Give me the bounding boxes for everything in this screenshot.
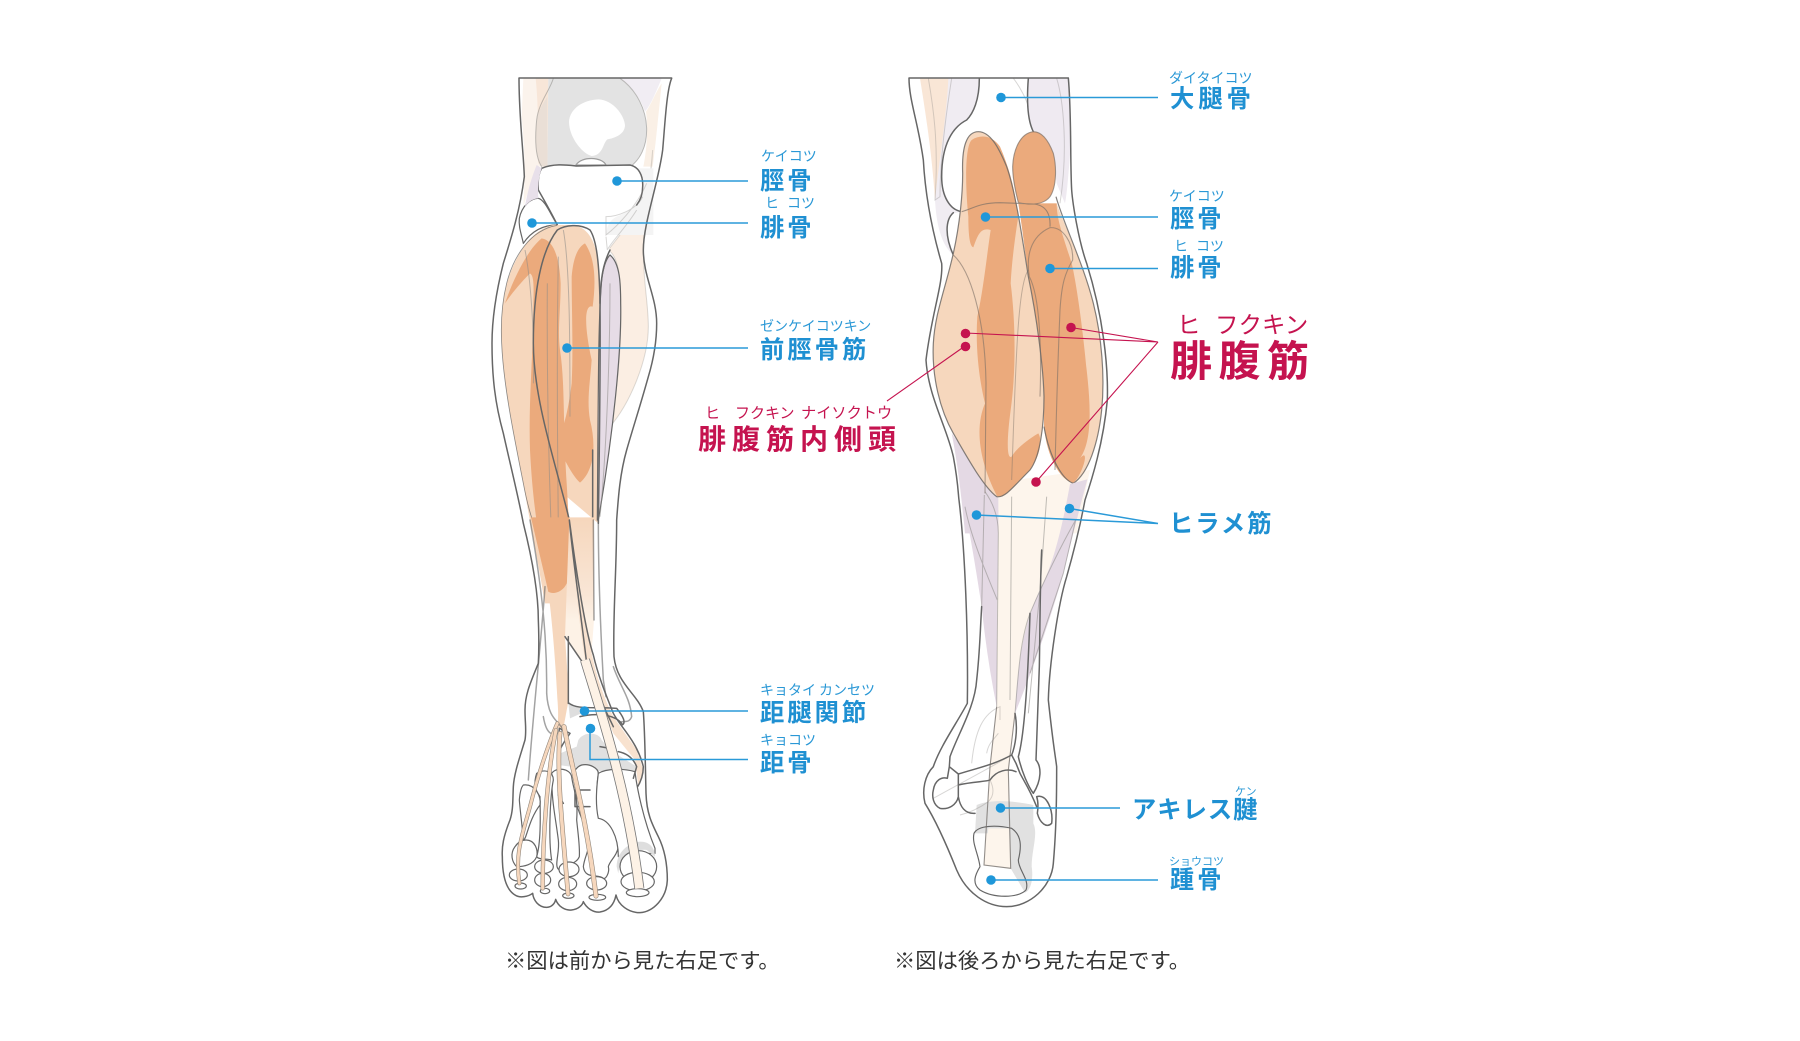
foot bones grey patches (558, 734, 637, 777)
tissue lines near tibia (606, 183, 647, 250)
left soleus purple (965, 510, 998, 707)
back lower leg anatomy (933, 479, 1087, 896)
tibia lower bone (565, 637, 603, 713)
lower muscle (531, 517, 570, 593)
front lower leg and foot anatomy (509, 517, 657, 900)
heel bone (974, 826, 1027, 896)
label: 距腿関節: キョタイ (760, 682, 816, 698)
lateral muscle dark (966, 137, 1040, 497)
muscle dark band 1 (505, 238, 569, 595)
toe tendons (518, 723, 557, 883)
fibula shaft line (593, 250, 610, 523)
big toe bones (620, 851, 657, 883)
first metatarsal (596, 769, 655, 857)
purple calf sliver (597, 255, 621, 520)
label: 腓骨 front: コツ (787, 195, 815, 211)
front skin outline (492, 78, 672, 913)
label: 腓骨 back: コツ (1196, 238, 1224, 254)
cream center shaft (984, 493, 1067, 868)
label: 腓骨 front (760, 195, 815, 242)
muscle base light (501, 225, 600, 603)
label: 腓腹筋内側頭: ヒ (705, 405, 720, 422)
label: 距骨 front: 距骨 (760, 750, 815, 777)
tissue lines (928, 78, 1064, 203)
leader line: 腓骨 back (1045, 264, 1158, 273)
thigh tissue (522, 78, 548, 207)
fibula head (519, 198, 557, 243)
muscle dark band 2 (555, 243, 594, 483)
ankle grey wedge (568, 703, 590, 718)
lateral muscle light (933, 132, 1044, 497)
note: front view: ※図は前から見た右足です。 (505, 949, 780, 973)
muscle left outline (501, 225, 557, 523)
tibia cream shaft (565, 517, 594, 673)
right thigh peach (643, 83, 662, 167)
label: 脛骨 front: 脛骨 (760, 168, 815, 195)
label: 腓腹筋: ヒ (1177, 312, 1200, 338)
talus and ankle faint lines (933, 707, 1012, 815)
muscle outline (933, 132, 1044, 497)
left purple tissue (935, 78, 978, 255)
label: 踵骨: ショウコツ (1169, 855, 1224, 868)
leader line: 脛骨 front (612, 176, 748, 186)
label: 前脛骨筋 (760, 318, 871, 364)
label: アキレス腱 (1132, 785, 1258, 824)
small upper muscle head (1013, 132, 1056, 204)
label: 腓骨 front: ヒ (765, 195, 779, 211)
label: 脛骨 back: 脛骨 (1170, 206, 1225, 233)
label: 前脛骨筋: 前脛骨筋 (760, 337, 869, 364)
femur side shade (536, 97, 547, 167)
right soleus purple (1015, 479, 1087, 713)
label: 脛骨 front (760, 148, 817, 195)
label: 脛骨 back: ケイコツ (1169, 188, 1225, 204)
calcaneus grey shade (975, 801, 1035, 893)
label: 腓腹筋内側頭 (698, 405, 902, 455)
main tendon to big toe (585, 660, 639, 888)
label: 腓腹筋内側頭: フクキン (735, 405, 795, 422)
front upper leg anatomy (501, 78, 662, 683)
peach thigh muscle (920, 78, 950, 200)
leader lines: ヒラメ筋 (972, 504, 1158, 524)
back upper leg anatomy (920, 78, 1103, 533)
label: 脛骨 front: ケイコツ (761, 148, 817, 164)
back view leg illustration (909, 78, 1107, 907)
label: 前脛骨筋: ゼンケイコツキン (760, 318, 871, 334)
tibia contour (962, 132, 1056, 227)
lateral peach tissue (608, 150, 653, 427)
upper purple tissue (620, 78, 662, 112)
leader line: 腓腹筋内側頭 (887, 342, 970, 401)
ankle bones (933, 607, 1037, 813)
label: 腓骨 back: 腓骨 (1170, 255, 1225, 282)
tarsal lines (558, 715, 637, 807)
label: 大腿骨: 大腿骨 (1170, 86, 1255, 113)
label: 距腿関節: カンセツ (819, 682, 875, 698)
peach strip (536, 78, 548, 165)
label: アキレス腱: アキレス腱 (1132, 797, 1258, 824)
front view leg illustration (492, 78, 672, 913)
label: 大腿骨 (1169, 70, 1255, 113)
label: ヒラメ筋: ヒラメ筋 (1169, 511, 1273, 538)
big toe grey (617, 842, 655, 873)
tibialis outline lines (569, 520, 643, 788)
label: アキレス腱: ケン (1235, 785, 1257, 798)
note: back view: ※図は後ろから見た右足です。 (894, 949, 1190, 973)
label: 腓腹筋内側頭: 腓腹筋内側頭 (698, 424, 902, 455)
leader line: 前脛骨筋 (562, 343, 748, 353)
tibia head (576, 158, 606, 165)
tibialis anterior outline (533, 226, 600, 523)
label: 腓骨 back: ヒ (1174, 238, 1188, 254)
label: 腓腹筋: 腓腹筋 (1170, 338, 1316, 385)
medial muscle light (1018, 203, 1103, 483)
femur outline (942, 78, 1033, 255)
tendon bundle (548, 583, 569, 728)
inner leg lines (528, 520, 632, 780)
patella white (569, 99, 625, 156)
label: 腓腹筋 (1170, 312, 1316, 385)
label: 腓骨 front: 腓骨 (760, 215, 815, 242)
label: 距骨 front: キョコツ (760, 732, 816, 748)
leader line: 脛骨 back (981, 212, 1158, 222)
grey square shade (605, 168, 653, 235)
right purple tissue (1028, 78, 1070, 203)
leader line: 大腿骨 (996, 93, 1158, 102)
label: 距骨 front (760, 732, 816, 777)
medial muscle dark (1018, 203, 1090, 483)
label: 距腿関節 (760, 682, 875, 727)
cream between muscle bases (990, 470, 1090, 533)
fibula lower (1018, 550, 1052, 825)
label: 腓骨 back (1170, 238, 1225, 282)
purple sliver (525, 165, 542, 207)
leader line: 距腿関節 (580, 706, 748, 716)
femur grey (547, 78, 647, 167)
leader line: 距骨 front (586, 724, 748, 760)
upper left soleus purple (952, 433, 998, 533)
label: 腓腹筋: フクキン (1215, 312, 1308, 338)
muscle fine lines (525, 230, 610, 683)
label: 距腿関節: 距腿関節 (760, 700, 869, 727)
soleus outlines (965, 492, 1076, 713)
label: 脛骨 back (1169, 188, 1225, 233)
label: 踵骨: 踵骨 (1170, 867, 1225, 894)
achilles tendon (984, 828, 1011, 868)
label: 腓腹筋内側頭: ナイソクトウ (801, 405, 892, 422)
leader line: 踵骨 (986, 875, 1158, 885)
metatarsals (573, 765, 619, 879)
leader line: 腓骨 front (527, 218, 748, 228)
fibula contour (953, 228, 1073, 493)
label: 踵骨 (1169, 855, 1225, 894)
back skin outline (909, 78, 1107, 907)
leader line: アキレス腱 (996, 803, 1120, 813)
femur outline (536, 78, 647, 167)
label: 大腿骨: ダイタイコツ (1169, 70, 1252, 86)
small toe bones (512, 840, 537, 867)
leader lines: 腓腹筋 (961, 323, 1158, 487)
